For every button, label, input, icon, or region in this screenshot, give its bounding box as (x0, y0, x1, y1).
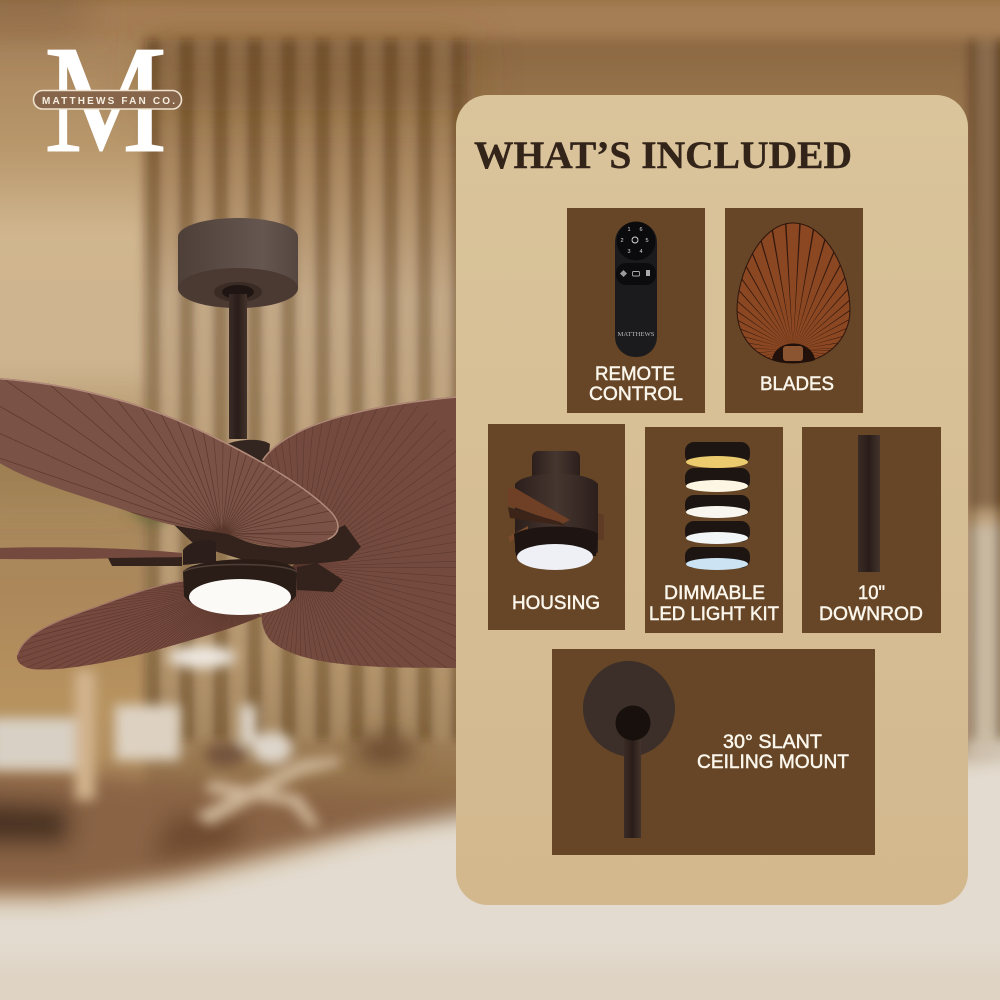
label: remote control: CONTROL (589, 383, 683, 405)
panel: what's included (456, 95, 968, 905)
icon: palm blade (736, 222, 850, 364)
icon: remote: 6 (639, 227, 643, 233)
label: slant ceiling mount: 30° SLANT (723, 731, 822, 753)
label: dimmable LED light kit: DIMMABLE (664, 582, 765, 604)
blade bracket: left (108, 557, 182, 566)
icon: remote (615, 222, 657, 357)
blade: lower left (16, 580, 262, 670)
logo monogram M: M (44, 15, 167, 185)
fan canopy (178, 218, 298, 308)
blade: upper left (0, 378, 339, 548)
label: 10 inch downrod: DOWNROD (819, 603, 923, 625)
label: 10 inch downrod: 10" (858, 582, 885, 604)
logo wordmark: MATTHEWS FAN CO. (42, 96, 175, 107)
icon: housing (508, 451, 604, 570)
label: blades: BLADES (760, 373, 834, 395)
icon: remote: 5 (645, 238, 649, 244)
heading: WHAT’S INCLUDED (474, 134, 852, 177)
icon: downrod (858, 435, 880, 572)
icon: remote: MATTHEWS (618, 332, 654, 338)
blade: large right (261, 396, 456, 668)
fan motor housing (183, 540, 297, 614)
icon: slant mount (583, 661, 675, 838)
logo: Matthews Fan Co. (34, 15, 182, 185)
icon: remote: 1 (627, 227, 631, 233)
ceiling fan product (0, 218, 465, 717)
card: housing (488, 424, 625, 630)
label: remote control: REMOTE (595, 363, 675, 385)
label: dimmable LED light kit: LED LIGHT KIT (649, 603, 779, 625)
fan LED light (189, 579, 291, 615)
card: blades (725, 208, 863, 413)
logo pill badge (34, 90, 182, 109)
blade bracket: upper (168, 519, 361, 564)
icon: remote: 3 (627, 249, 631, 255)
icon: remote: 2 (620, 238, 624, 244)
card: slant ceiling mount (552, 649, 875, 855)
icon: remote: 4 (639, 249, 643, 255)
label: slant ceiling mount: CEILING MOUNT (697, 751, 849, 773)
fan downrod (229, 294, 247, 439)
blade: thin left (0, 547, 182, 559)
card: dimmable LED light kit (645, 427, 783, 633)
blade bracket: right lower (297, 563, 343, 592)
card: remote control (567, 208, 705, 413)
icon: LED light stack (685, 442, 750, 570)
fan collar (217, 440, 270, 462)
label: housing: HOUSING (512, 592, 600, 614)
card: 10 inch downrod (802, 427, 941, 633)
